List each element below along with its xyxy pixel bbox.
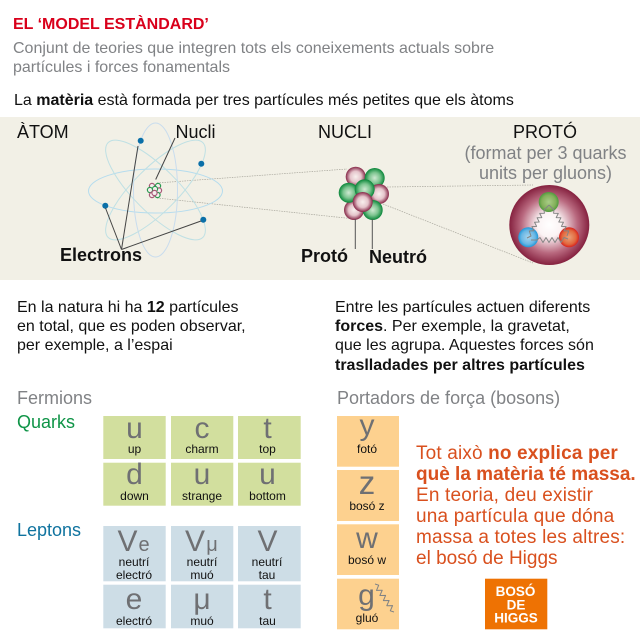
label: NUCLI: NUCLI bbox=[318, 122, 372, 142]
box: Higgs boson: HIGGS bbox=[494, 610, 538, 626]
text: left paragraph: en total, que es poden observar, bbox=[17, 318, 246, 335]
text: right paragraph: traslladades per altres partícules bbox=[335, 357, 585, 374]
label: Protó: Protó bbox=[301, 246, 348, 266]
grid: leptons: t bbox=[263, 583, 272, 616]
grid: quarks: charm bbox=[185, 442, 219, 456]
grid: leptons: neutrí bbox=[252, 555, 283, 569]
grid: quarks: bottom bbox=[249, 489, 286, 503]
grid: quarks: c bbox=[194, 412, 210, 445]
grid: quarks: u bbox=[194, 458, 210, 491]
panel: matter scale background bbox=[0, 117, 640, 280]
text: left paragraph: per exemple, a l’espai bbox=[17, 337, 173, 354]
grid: bosons: z bbox=[359, 464, 375, 501]
grid: leptons: neutrí bbox=[119, 555, 150, 569]
text: left paragraph bbox=[17, 299, 246, 354]
label: Neutró: Neutró bbox=[369, 247, 427, 267]
text: right paragraph: que les agrupa. Aquestes forces són bbox=[335, 337, 594, 354]
grid: bosons bbox=[337, 409, 399, 629]
grid: bosons: fotó bbox=[357, 442, 377, 456]
caption: proton composition bbox=[464, 143, 627, 183]
grid: quarks: u bbox=[259, 458, 276, 491]
grid: leptons: μ bbox=[206, 534, 218, 556]
callout: Higgs explanation: què la matèria té massa. bbox=[416, 464, 636, 485]
label: ÀTOM: ÀTOM bbox=[17, 122, 69, 142]
icon: atom nucleus bbox=[147, 183, 162, 198]
text: right paragraph bbox=[335, 299, 594, 374]
diagram: atom bbox=[88, 123, 222, 257]
grid: leptons: tau bbox=[259, 614, 276, 628]
intro sentence: La matèria està formada per tres partícules més petites que els àtoms bbox=[14, 92, 514, 109]
text: left paragraph: En la natura hi ha 12 partícules bbox=[17, 299, 238, 316]
grid: leptons: V bbox=[257, 525, 278, 558]
title: EL ‘MODEL ESTÀNDARD’ bbox=[13, 14, 209, 33]
leader lines bbox=[106, 138, 201, 250]
grid: leptons: neutrí bbox=[187, 555, 218, 569]
diagram: proton bbox=[509, 185, 589, 265]
subtitle bbox=[13, 40, 494, 76]
grid: quarks: u bbox=[126, 412, 143, 445]
grid: leptons: V bbox=[117, 525, 138, 558]
connector lines between diagrams bbox=[157, 169, 533, 263]
grid: leptons: μ bbox=[193, 583, 211, 616]
callout: Higgs explanation: En teoria, deu existir bbox=[416, 485, 594, 506]
grid: quarks: d bbox=[126, 458, 143, 491]
grid: quarks bbox=[103, 412, 301, 506]
callout: Higgs explanation: una partícula que dóna bbox=[416, 506, 615, 527]
grid: leptons: muó bbox=[190, 568, 214, 582]
grid: quarks: top bbox=[259, 442, 276, 456]
grid: leptons: electró bbox=[116, 614, 152, 628]
caption: proton composition: (format per 3 quarks bbox=[464, 143, 627, 163]
icon: gluon springs bbox=[527, 205, 569, 242]
grid: leptons: V bbox=[185, 525, 205, 558]
grid: quarks: down bbox=[120, 489, 149, 503]
grid: leptons: muó bbox=[190, 614, 214, 628]
icon: electrons bbox=[102, 138, 206, 223]
box: Higgs boson bbox=[485, 579, 547, 629]
box: Higgs boson: DE bbox=[507, 598, 525, 612]
grid: leptons: tau bbox=[259, 568, 275, 582]
grid: leptons: electró bbox=[116, 568, 152, 582]
label: Nucli: Nucli bbox=[176, 122, 216, 142]
grid: bosons: gluó bbox=[356, 611, 379, 625]
text: right paragraph: forces. Per exemple, la gravetat, bbox=[335, 318, 570, 335]
heading: Portadors de força: Portadors de força (bosons) bbox=[337, 388, 560, 408]
grid: bosons: w bbox=[355, 522, 378, 555]
grid: bosons: bosó w bbox=[348, 553, 386, 567]
grid: bosons: g bbox=[358, 579, 375, 612]
box: Higgs boson: BOSÓ bbox=[496, 584, 535, 599]
subtitle: Conjunt de teories que integren tots els coneixements actuals sobre bbox=[13, 40, 494, 57]
grid: bosons: bosó z bbox=[349, 499, 385, 513]
icon: gluon wave bbox=[375, 584, 394, 612]
grid: quarks: up bbox=[128, 442, 141, 456]
heading: Fermions: Fermions bbox=[17, 388, 92, 408]
label: Electrons: Electrons bbox=[60, 245, 142, 265]
heading: Quarks: Quarks bbox=[17, 412, 75, 432]
grid: quarks: t bbox=[263, 412, 272, 445]
grid: leptons: e bbox=[126, 583, 142, 616]
grid: bosons: y bbox=[360, 409, 374, 442]
callout: Higgs explanation bbox=[416, 443, 636, 569]
subtitle: partícules i forces fonamentals bbox=[13, 59, 230, 76]
label: PROTÓ: PROTÓ bbox=[513, 121, 577, 142]
grid: quarks: strange bbox=[182, 489, 222, 503]
caption: proton composition: units per gluons) bbox=[479, 163, 612, 183]
diagram: nucleus bbox=[339, 167, 389, 249]
text: right paragraph: Entre les partícules actuen diferents bbox=[335, 299, 590, 316]
callout: Higgs explanation: el bosó de Higgs bbox=[416, 548, 558, 569]
callout: Higgs explanation: Tot això no explica per bbox=[416, 443, 618, 464]
heading: Leptons: Leptons bbox=[17, 520, 81, 540]
grid: leptons: e bbox=[138, 534, 150, 556]
grid: leptons bbox=[103, 525, 301, 628]
callout: Higgs explanation: massa a totes les altres: bbox=[416, 527, 625, 548]
